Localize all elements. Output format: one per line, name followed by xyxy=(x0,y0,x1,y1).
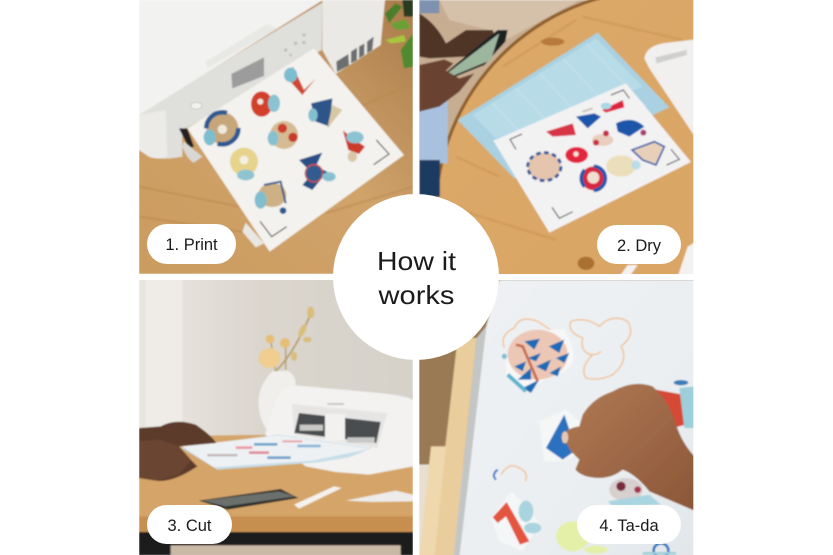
stickers xyxy=(204,67,365,214)
label: 2. Dry xyxy=(597,225,681,264)
label: 1. Print xyxy=(147,224,236,264)
easel frame xyxy=(433,338,477,555)
printed sticker sheet xyxy=(187,48,404,252)
title: How it works: How it xyxy=(377,246,457,276)
scissors bottom right xyxy=(620,264,638,274)
pen tool xyxy=(294,486,342,509)
wall xyxy=(139,278,413,438)
wooden table xyxy=(139,434,413,518)
white tool, right xyxy=(644,39,696,138)
doodle outlines xyxy=(501,318,631,481)
phone on table xyxy=(199,489,298,510)
fish sticker xyxy=(502,330,573,393)
scissors on table xyxy=(346,491,413,502)
paper tray tab xyxy=(242,223,264,247)
red arrow sticker xyxy=(491,470,541,551)
wood floor xyxy=(139,0,413,274)
printed sticker sheet xyxy=(493,83,691,233)
title: How it works: works xyxy=(377,280,454,310)
center circle heading xyxy=(333,194,499,360)
vase xyxy=(258,371,296,433)
panel: step 3 cut photo xyxy=(139,278,413,555)
cutting machine xyxy=(265,385,413,475)
label: 4. Ta-da xyxy=(577,505,681,544)
backdrop xyxy=(416,278,696,465)
label: 3. Cut xyxy=(147,505,232,544)
printer body xyxy=(139,3,322,159)
floor background xyxy=(419,0,587,196)
label: 2. Dry: 2. Dry xyxy=(617,237,662,255)
bottom sticker peek xyxy=(643,543,676,555)
lower sticker under hand xyxy=(608,478,661,506)
blue sticker held xyxy=(540,411,578,460)
label: 4. Ta-da: 4. Ta-da xyxy=(599,517,659,535)
label: 1. Print: 1. Print xyxy=(165,236,218,254)
board shadow strip xyxy=(453,325,488,555)
right edge sticker xyxy=(656,380,696,428)
panel: step 2 dry photo xyxy=(419,0,694,274)
mat and sheet xyxy=(181,435,372,470)
person with phone xyxy=(419,0,508,197)
white gutter strips xyxy=(139,0,693,555)
stickers xyxy=(528,100,664,190)
label: 3. Cut: 3. Cut xyxy=(167,517,212,535)
dried flowers xyxy=(259,306,314,371)
printer ink tank unit xyxy=(322,0,385,74)
white board xyxy=(459,280,696,555)
round wooden table xyxy=(435,0,602,197)
yellow-green sketch xyxy=(556,521,608,554)
panel: step 1 print photo xyxy=(139,0,413,274)
hand xyxy=(563,384,696,511)
panel: step 4 ta-da photo xyxy=(416,278,696,555)
blue cutting mat xyxy=(458,33,669,178)
houseplant xyxy=(385,0,413,68)
infographic: how it works xyxy=(139,0,694,555)
hands xyxy=(139,422,216,481)
